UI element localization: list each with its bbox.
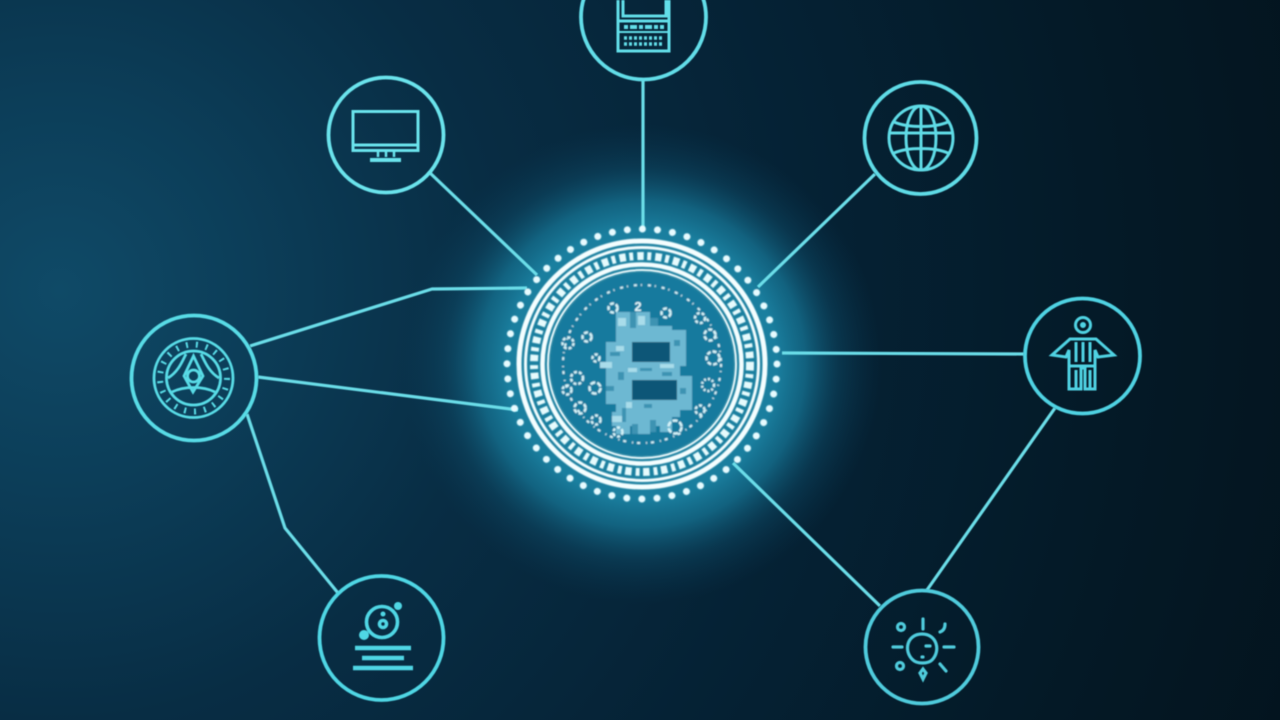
coin outer rings [519, 241, 765, 487]
bitcoin highlights [600, 316, 674, 422]
phone icon [618, 0, 669, 51]
connector lines [247, 80, 1055, 606]
node: globe [864, 82, 976, 194]
node: phone [581, 0, 706, 80]
person icon [1052, 318, 1114, 389]
globe icon [889, 106, 953, 170]
center glow [402, 124, 882, 604]
coin disc [551, 273, 733, 455]
bitcoin slots [632, 342, 677, 400]
bitcoin symbol [606, 312, 692, 434]
lightbulb icon [893, 619, 954, 679]
coin inner ornaments [562, 285, 721, 443]
node: monitor [328, 78, 444, 192]
central coin [507, 229, 777, 499]
coin digit: 2 [634, 299, 642, 314]
coin dotted ring [507, 229, 777, 499]
bitcoin texture [606, 312, 686, 434]
coin glyph band [534, 256, 750, 472]
orb icon [353, 606, 413, 668]
node: orb [320, 576, 444, 700]
node: ring hub [132, 316, 256, 440]
monitor icon [353, 112, 418, 160]
orb satellites [359, 602, 402, 640]
node: lightbulb [866, 590, 978, 704]
ring hub icon [154, 338, 233, 418]
node: person [1025, 298, 1140, 414]
